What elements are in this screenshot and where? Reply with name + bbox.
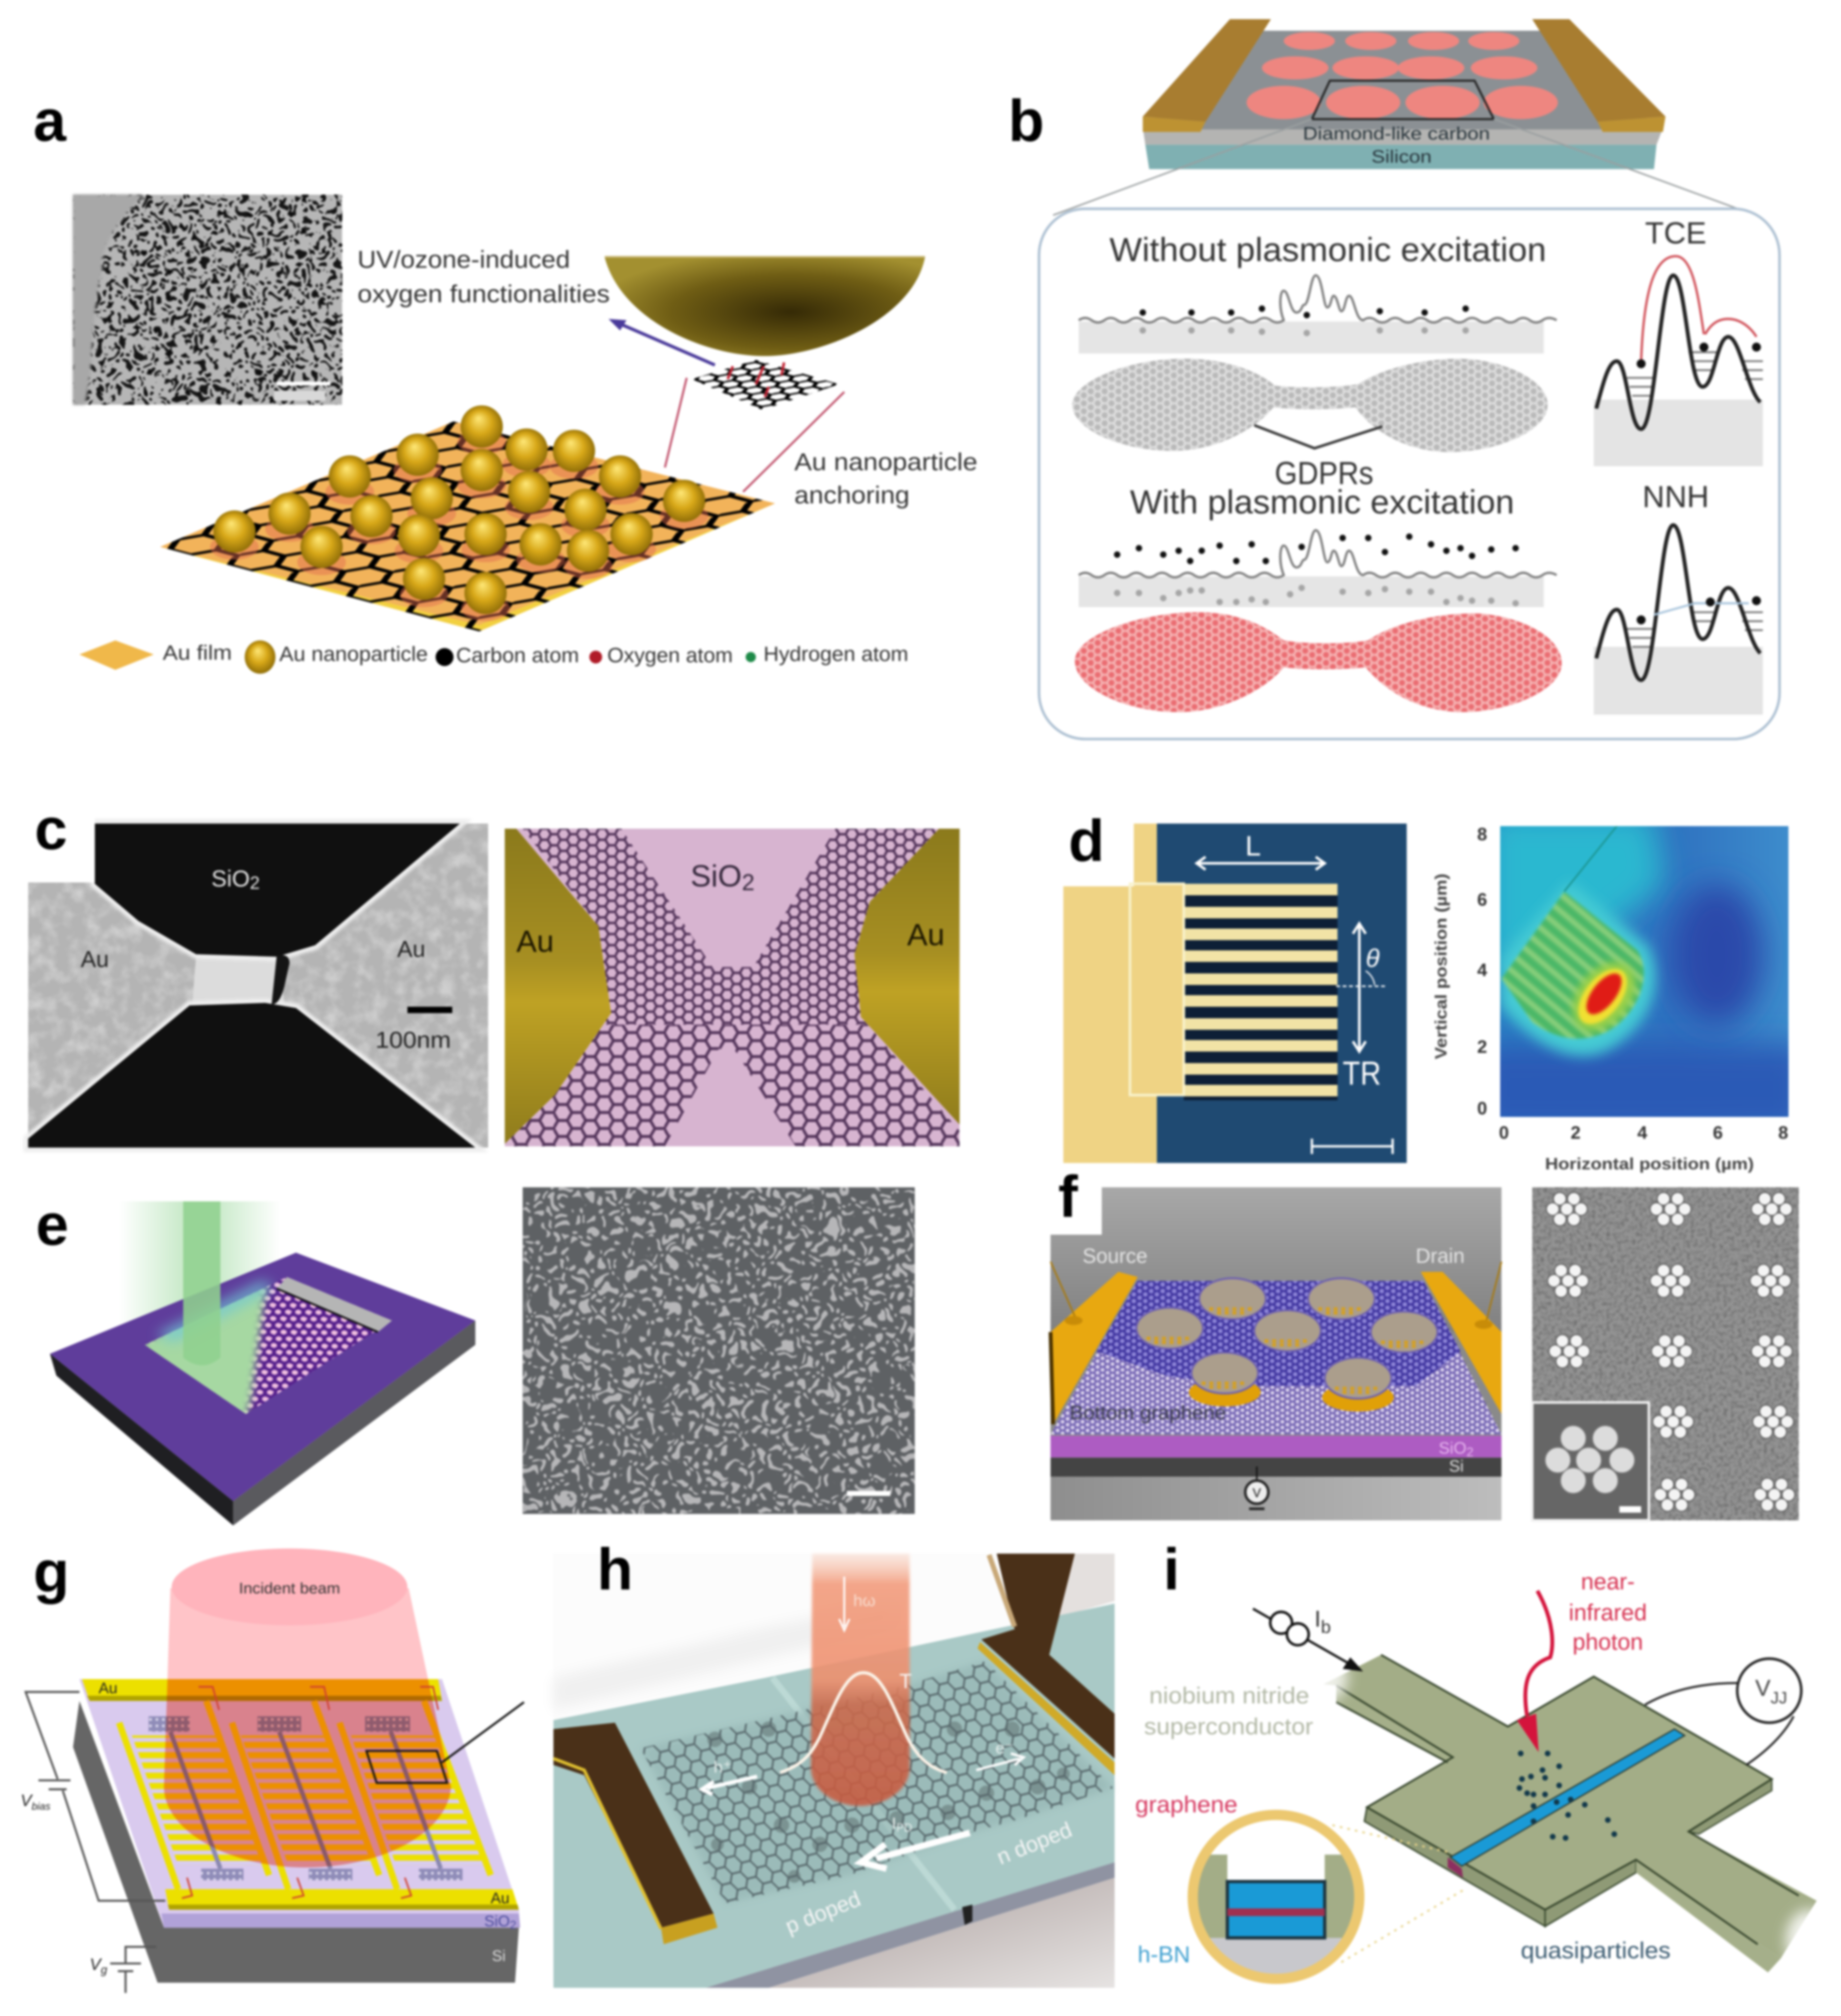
graphene sheet on Au film [160,422,775,631]
annotation: UV/ozone-induced oxygen functionalities [357,246,610,308]
panel h annotations: T [899,1669,912,1693]
label GDPRs: GDPRs [1275,456,1373,491]
green light halo [119,1201,281,1349]
annotation: Au nanoparticle anchoring [794,449,978,509]
L, TR and angle annotations: TR [1343,1055,1381,1092]
device labels: V [20,1791,31,1809]
red excited graphene ribbon [1075,612,1562,712]
SEM labels: 100nm [375,1027,451,1053]
gold contact bars [82,1679,519,1910]
L, TR and angle annotations: θ [1366,944,1379,973]
label f [1038,1164,1102,1235]
schematic: graphene bowtie on SiO2: 2 [742,869,755,895]
panel g: interdigitated graphene detector array [20,1539,524,1993]
near-infrared photon label [1569,1569,1647,1655]
schematic labels: SiO [1439,1438,1467,1457]
schematic: graphene bowtie on SiO2: Au [516,924,554,958]
L, TR and angle annotations: L [1245,830,1261,862]
heat map axes: 0 [1499,1123,1509,1143]
heat map axes: 4 [1477,960,1487,980]
panel h annotations [713,1591,1075,1938]
energy landscape without excitation [1079,276,1557,354]
bias current source [1253,1606,1363,1671]
annotation: Au nanoparticle anchoring: Au nanoparticle [794,449,978,476]
junction voltmeter [1645,1659,1801,1765]
SEM labels: SiO [211,865,250,891]
heat map axes [1431,824,1788,1173]
arrow to oxygen functionalities [609,319,715,365]
legend: Au nanoparticle [279,642,428,665]
annotation: Au nanoparticle anchoring: anchoring [794,482,910,509]
heat map axes: 2 [1571,1123,1581,1143]
gate voltage symbol [1245,1467,1268,1509]
heat map axes: 0 [1477,1098,1487,1118]
device labels: Au [491,1890,509,1907]
temperature profile curve [780,1673,947,1773]
SEM labels: Au [397,936,425,962]
SEM nanoparticle image [522,1187,915,1514]
legend: Hydrogen atom [764,642,908,665]
near-infrared photon label: near- [1581,1569,1635,1594]
quasiparticle dots [1517,1751,1617,1841]
layer labels: Silicon [1371,147,1432,167]
panel h annotations: p doped [782,1887,864,1938]
graphene channels [148,1716,463,1880]
device labels: 2 [510,1918,516,1931]
heading: with plasmonic excitation: With plasmonic excitation [1130,484,1514,521]
gate voltage symbol: V [1253,1486,1261,1500]
schematic labels: Bottom graphene [1070,1402,1226,1424]
right electrode [978,1553,1115,1775]
L, TR and angle annotations [1196,830,1393,1154]
label f: f [1058,1164,1078,1230]
heat map axes: 8 [1477,824,1487,844]
graphene label: graphene [1135,1792,1237,1817]
panel c: bowtie graphene device [0,796,960,1148]
schematic: graphene bowtie on SiO2 [505,829,960,1147]
label d: d [1069,808,1105,873]
device block [50,1252,475,1526]
panel h: graphene pn junction photothermal detector [553,1536,1115,1988]
SEM labels: Au [81,946,109,972]
SEM inset [1532,1402,1649,1520]
heat map axes: 8 [1778,1123,1788,1143]
TCE diagram: TCE [1645,215,1707,250]
label h: h [597,1536,633,1602]
junction voltmeter: JJ [1771,1688,1787,1707]
selection box and pointer [366,1702,524,1783]
rounded inset box [1039,209,1780,739]
panel d: plasmonic grating and photocurrent map [1063,808,1807,1173]
zoom lines [1053,119,1755,215]
device labels: Au [99,1680,118,1697]
label a: a [33,88,67,154]
near-infrared photon arrow [1517,1591,1552,1752]
red current arrows [182,1687,438,1898]
interdigitated fingers [119,1701,491,1889]
heat map axes: 4 [1637,1123,1647,1143]
SEM labels [81,865,452,1053]
left electrode [553,1723,718,1944]
bias current source: b [1321,1617,1331,1637]
panel i: Josephson junction photon detector [1135,1536,1832,1989]
schematic labels: Drain [1416,1244,1464,1268]
near-infrared photon label: photon [1572,1629,1643,1655]
niobium nitride cross [1307,1655,1832,1972]
heat map axes: 2 [1477,1037,1487,1057]
device labels: g [101,1963,107,1976]
SEM of heptamer clusters [1532,1187,1799,1520]
panel h annotations: e⁻ [995,1738,1013,1757]
device schematic [1050,1187,1501,1520]
label b: b [1008,88,1044,154]
incident beam [164,1548,451,1868]
legend: Carbon atom [456,643,579,667]
panel h annotations: I [892,1814,896,1833]
quasiparticles label: quasiparticles [1521,1937,1671,1963]
NNH diagram [1594,479,1763,715]
label c: c [34,796,67,862]
heat map axes: Horizontal position (µm) [1545,1154,1754,1173]
panel h annotations: hω [853,1591,876,1610]
legend [80,640,908,674]
annotation: UV/ozone-induced oxygen functionalities: oxygen functionalities [357,281,610,308]
schematic labels [1070,1244,1474,1475]
label g: g [33,1539,69,1605]
legend: Oxygen atom [607,643,733,667]
niobium nitride label: niobium nitride [1149,1683,1309,1708]
device labels: V [90,1955,101,1973]
bias circuit [26,1692,165,1993]
panel f: source drain graphene with plasmonic clusters [1038,1164,1799,1520]
near-infrared photon label: infrared [1569,1600,1647,1625]
panel h annotations: h⁺ [713,1758,732,1776]
schematic: graphene bowtie on SiO2: Au [907,918,945,952]
backdrop and substrate [553,1553,1115,1988]
device schematic [1143,19,1666,169]
heading: without plasmonic excitation: Without plasmonic excitation [1109,232,1547,269]
h-BN label: h-BN [1138,1942,1190,1967]
substrate block [73,1679,520,1983]
junction cross-section inset [1185,1812,1367,1989]
TEM micrograph [73,195,342,405]
h-BN graphene junction strip [1448,1729,1685,1878]
graphene sheet [641,1661,1113,1904]
device labels [20,1680,516,1976]
SEM image [0,807,488,1148]
graphene detail [692,360,839,410]
niobium nitride label: superconductor [1144,1714,1313,1739]
annotation: UV/ozone-induced oxygen functionalities: UV/ozone-induced [357,246,570,273]
energy landscape with excitation [1079,530,1557,607]
panel h annotations: PD [896,1821,912,1834]
schematic labels: Source [1082,1244,1147,1268]
heat map axes: 6 [1713,1123,1723,1143]
TCE diagram [1594,215,1763,466]
GDPRs pointer arrows [1254,425,1382,448]
panel h annotations: n doped [993,1817,1075,1870]
device labels: Si [492,1948,506,1964]
layer labels: Diamond-like carbon [1303,124,1490,144]
heat map axes: 6 [1477,890,1487,909]
zoom lines [665,378,844,492]
NNH diagram: NNH [1642,479,1709,514]
label i: i [1163,1536,1180,1602]
legend: Au film [163,641,232,664]
heat map axes: Vertical position (µm) [1431,873,1450,1059]
bias current source: I [1314,1606,1321,1632]
carrier and light arrows [702,1577,1024,1869]
grating micrograph [1063,823,1407,1163]
incident beam: Incident beam [239,1580,340,1597]
grey graphene ribbon [1072,359,1548,452]
schematic labels: Si [1449,1457,1464,1475]
layer labels [1303,124,1490,167]
junction voltmeter: V [1755,1675,1771,1701]
dotted zoom lines [1332,1825,1467,1962]
niobium nitride label [1144,1683,1313,1739]
device labels: SiO [484,1913,510,1930]
panel a: gold nanoparticles on graphene [33,88,978,674]
panel b: plasmonic graphene ribbons [1008,19,1780,739]
red laser beam [811,1553,910,1806]
label e: e [36,1192,68,1258]
schematic: graphene bowtie on SiO2: SiO [691,858,742,893]
gold nanoparticles [210,405,708,621]
laser beam [183,1201,220,1365]
photocurrent heat map [1498,824,1790,1119]
device labels: bias [31,1801,50,1812]
panel e: laser on suspended graphene [36,1187,915,1526]
schematic labels: 2 [1467,1445,1474,1459]
SEM labels: 2 [250,873,260,893]
gold hemisphere [605,257,925,356]
